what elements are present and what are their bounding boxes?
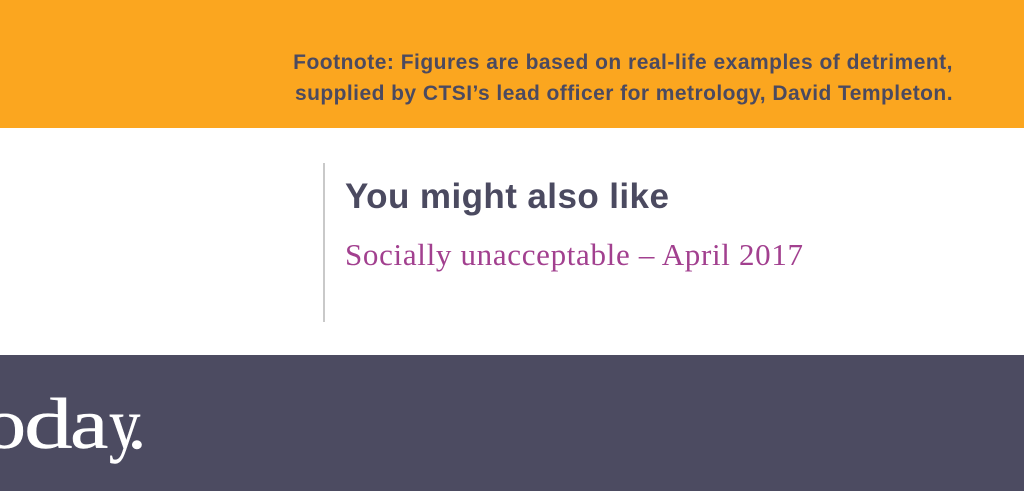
footer logo text: .: [127, 384, 147, 464]
footer logo text: a: [70, 384, 109, 464]
heading: you might also like: You might also like: [345, 177, 669, 216]
footer band: [0, 355, 1024, 491]
footnote text line 2: supplied by CTSI’s lead officer for metrology, David Templeton.: [295, 82, 953, 105]
footer logo text: d: [24, 384, 73, 464]
footnote banner: [0, 0, 1024, 128]
link: socially unacceptable: Socially unacceptable – April 2017: [345, 237, 804, 272]
vertical divider: [323, 163, 325, 322]
footnote text line 1: Footnote: Figures are based on real-life examples of detriment,: [293, 51, 953, 74]
footer logo text: [0, 384, 147, 464]
footer logo text: y: [109, 384, 140, 464]
